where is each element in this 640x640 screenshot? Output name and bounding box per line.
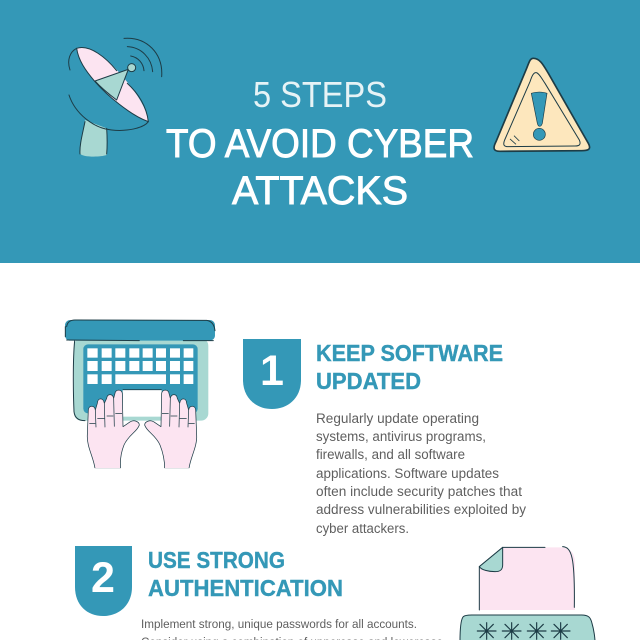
heading: keep software updated: KEEP SOFTWARE: [316, 340, 503, 366]
keyboard keys: [87, 348, 193, 384]
text block: step 2 body: Implement strong, unique passwords for all accounts.: [141, 617, 417, 631]
right hand: [145, 390, 197, 468]
text block: step 1 body: applications. Software updates: [316, 466, 499, 481]
heading: keep software updated: [316, 340, 503, 394]
heading: use strong authentication: [148, 547, 343, 601]
text block: step 2 body: [141, 617, 443, 640]
title: 5 STEPS: [253, 74, 387, 115]
number badge 1: [243, 339, 301, 409]
title: ATTACKS: [232, 169, 408, 213]
panel: step 1 keep software updated: [65, 320, 526, 536]
panel: step 2 use strong authentication: [75, 546, 595, 640]
number badge 2: [75, 546, 132, 616]
icon: satellite dish: [69, 38, 162, 157]
panel: header banner: [0, 0, 640, 263]
heading: use strong authentication: AUTHENTICATION: [148, 575, 343, 601]
title: TO AVOID CYBER: [166, 122, 474, 166]
text block: step 1 body: cyber attackers.: [316, 521, 409, 536]
password asterisks: [477, 623, 570, 639]
icon: password document: [460, 547, 595, 640]
text block: step 1 body: firewalls, and all software: [316, 447, 465, 462]
icon: warning triangle: [494, 58, 590, 151]
left hand: [87, 390, 139, 468]
title: [166, 74, 474, 213]
number badge 1: 1: [260, 347, 284, 395]
text block: step 1 body: systems, antivirus programs,: [316, 429, 486, 444]
text block: step 1 body: [316, 411, 526, 536]
text block: step 1 body: Regularly update operating: [316, 411, 479, 426]
text block: step 1 body: address vulnerabilities exploited by: [316, 502, 526, 517]
text block: step 1 body: often include security patches that: [316, 484, 522, 499]
number badge 2: 2: [91, 554, 115, 602]
icon: laptop with typing hands: [65, 320, 215, 469]
heading: keep software updated: UPDATED: [316, 368, 421, 394]
heading: use strong authentication: USE STRONG: [148, 547, 285, 573]
